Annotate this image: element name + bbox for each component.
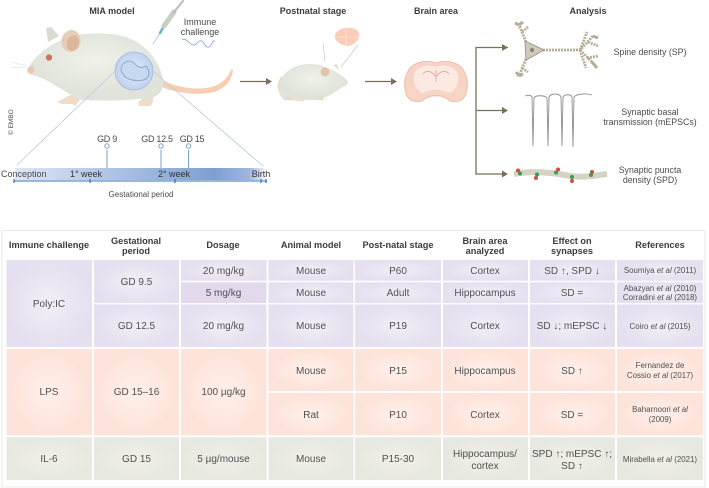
label: immune challenge: Immune	[184, 17, 216, 27]
table rows: IL-6: Mouse	[296, 454, 326, 465]
table header: Gestational	[111, 236, 161, 246]
table header: Immune challenge	[9, 240, 89, 250]
table rows: LPS: Fernandez de	[636, 361, 685, 370]
arrow: MIA to postnatal	[240, 78, 272, 85]
table header: Dosage	[206, 240, 240, 250]
label: synaptic puncta density	[619, 165, 681, 185]
table rows: LPS: LPS	[40, 387, 59, 398]
table rows: Poly:IC: Cortex	[470, 266, 500, 277]
table rows: Poly:IC: Coiro et al (2015)	[630, 322, 691, 331]
copyright text: © EMBO	[7, 109, 15, 135]
table rows: LPS: Cortex	[470, 410, 500, 421]
table rows: Poly:IC: GD 9.5	[121, 277, 153, 288]
timeline: gestational period: Birth	[252, 169, 270, 179]
table rows: LPS: GD 15–16	[114, 387, 160, 398]
table rows: Poly:IC: Mouse	[296, 266, 326, 277]
table rows: Poly:IC: SD =	[561, 288, 583, 299]
label: synaptic basal transmission: Synaptic basal	[621, 107, 679, 117]
label: synaptic puncta density: density (SPD)	[623, 175, 677, 185]
timeline: gestational period	[1, 134, 270, 199]
illustration: coronal brain section	[405, 61, 467, 102]
table header: Animal model	[281, 240, 341, 250]
table rows: IL-6: Hippocampus/	[453, 449, 517, 460]
label: synaptic basal transmission	[603, 107, 697, 127]
table rows: Poly:IC: 20 mg/kg	[203, 266, 244, 277]
icon: syringe	[153, 1, 183, 44]
markers: gestational days: GD 15	[180, 134, 205, 144]
table header	[9, 236, 685, 256]
illustration: synaptic puncta on dendrite	[514, 168, 607, 183]
table header: period	[122, 246, 150, 256]
table rows: Poly:IC: Mouse	[296, 288, 326, 299]
table header: Effect on	[552, 236, 592, 246]
markers: gestational days: GD 9	[97, 134, 117, 144]
heading: Postnatal stage: Postnatal stage	[280, 6, 346, 16]
heading: Brain area: Brain area	[414, 6, 459, 16]
table rows: Poly:IC: Hippocampus	[454, 288, 516, 299]
table rows: Poly:IC: 5 mg/kg	[206, 288, 241, 299]
label: spine density: Spine density (SP)	[614, 47, 686, 57]
table rows: LPS: P10	[389, 410, 407, 421]
table rows: LPS: Mouse	[296, 366, 326, 377]
table header: References	[635, 240, 685, 250]
arrow tree: brain to analyses	[476, 44, 508, 178]
heading: Analysis: Analysis	[569, 6, 607, 16]
table rows: Poly:IC: Cortex	[470, 321, 500, 332]
table rows: IL-6: SD ↑	[561, 461, 583, 472]
table rows: IL-6: cortex	[471, 461, 499, 472]
table rows: Poly:IC: P19	[389, 321, 407, 332]
table header: Post-natal stage	[363, 240, 433, 250]
illustration: adult mouse with embryo	[11, 27, 233, 106]
arrow: postnatal to brain	[365, 78, 397, 85]
table rows: Poly:IC: GD 12.5	[118, 321, 156, 332]
timeline: gestational period: 2° week	[158, 169, 191, 179]
timeline: gestational period: Gestational period	[109, 190, 173, 199]
table rows: Poly:IC: Soumiya et al (2011)	[624, 266, 696, 275]
table rows: LPS: (2009)	[649, 415, 672, 424]
table rows: Poly:IC: Poly:IC	[33, 299, 65, 310]
table rows: IL-6	[6, 437, 703, 480]
table rows: IL-6: 5 µg/mouse	[197, 454, 250, 465]
illustration: neuron	[515, 22, 598, 76]
table rows: IL-6: GD 15	[122, 454, 151, 465]
table rows: Poly:IC: Abazyan et al (2010)	[624, 284, 697, 293]
zoom lines from embryo to timeline	[17, 71, 263, 166]
table rows: LPS: Baharnoori et al	[632, 405, 688, 414]
label: synaptic puncta density: Synaptic puncta	[619, 165, 681, 175]
table header: synapses	[551, 246, 593, 256]
table rows: Poly:IC: Corradini et al (2018)	[623, 293, 697, 302]
label: immune challenge	[181, 17, 219, 37]
table rows: LPS: Cossio et al (2017)	[627, 371, 693, 380]
timeline: gestational period: Conception	[1, 169, 47, 179]
table rows: Poly:IC	[6, 260, 703, 347]
table rows: Poly:IC: Mouse	[296, 321, 326, 332]
table frame	[2, 230, 705, 487]
label: synaptic basal transmission: transmission (mEPSCs)	[603, 117, 697, 127]
markers: gestational days	[97, 134, 205, 168]
label: immune challenge: challenge	[181, 27, 219, 37]
heading: MIA model: MIA model	[89, 6, 135, 16]
table rows: Poly:IC: P60	[389, 266, 407, 277]
table rows: LPS: Rat	[303, 410, 319, 421]
table rows: IL-6: Mirabella et al (2021)	[623, 455, 697, 464]
table header: Brain area	[463, 236, 508, 246]
table rows: IL-6: P15-30	[382, 454, 415, 465]
markers: gestational days: GD 12.5	[141, 134, 173, 144]
table rows: LPS: Hippocampus	[454, 366, 516, 377]
table rows: IL-6: SPD ↑; mEPSC ↑;	[532, 449, 612, 460]
table rows: LPS: SD ↑	[561, 366, 583, 377]
table rows: LPS	[6, 349, 703, 435]
table rows: IL-6: IL-6	[40, 454, 58, 465]
table header: analyzed	[466, 246, 504, 256]
illustration: small mouse with brain	[279, 28, 360, 100]
table rows: LPS: SD =	[561, 410, 583, 421]
table rows: LPS: P15	[389, 366, 407, 377]
icon: immune wave	[182, 39, 215, 47]
table rows: Poly:IC: SD ↑, SPD ↓	[544, 266, 600, 277]
chart: mEPSC traces	[525, 94, 592, 147]
timeline: gestational period: 1° week	[70, 169, 103, 179]
table rows: Poly:IC: 20 mg/kg	[203, 321, 244, 332]
table rows: Poly:IC: Adult	[387, 288, 410, 299]
table rows: Poly:IC: SD ↓; mEPSC ↓	[537, 321, 607, 332]
table rows: LPS: 100 µg/kg	[201, 387, 246, 398]
